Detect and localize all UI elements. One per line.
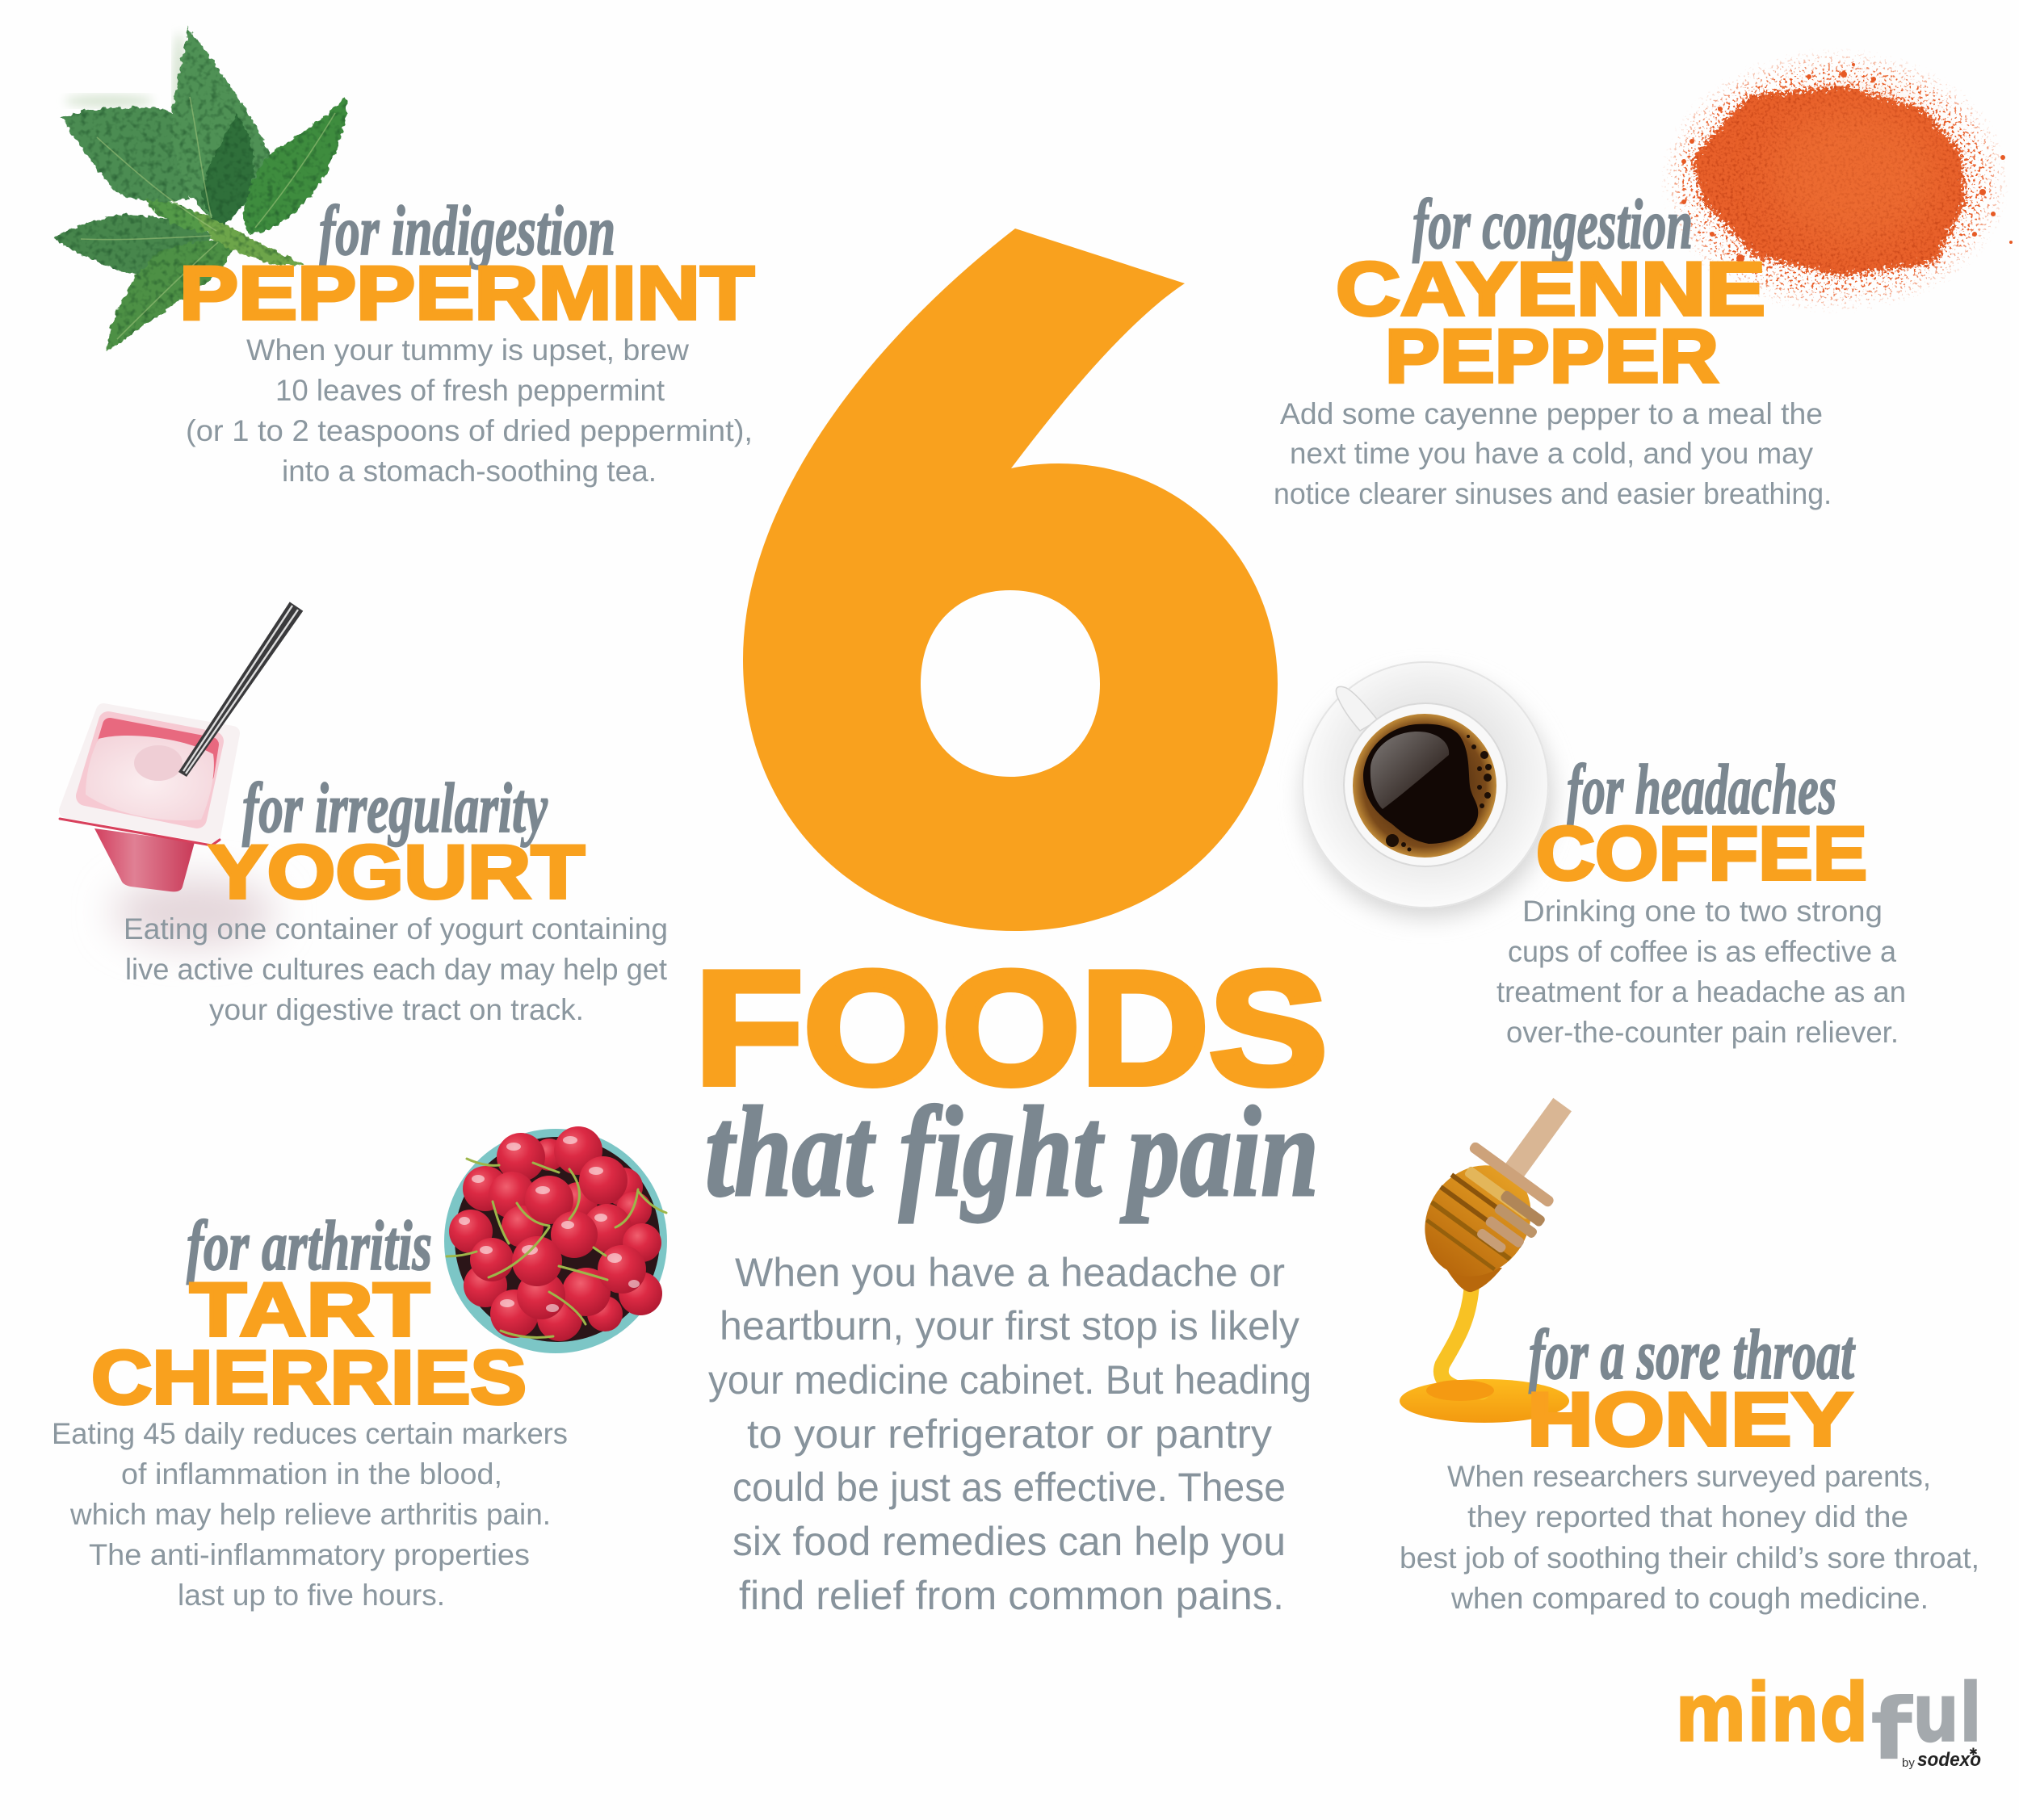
logo: mindful by sodexo: f	[1870, 1680, 1913, 1779]
intro paragraph: your medicine cabinet. But heading	[708, 1357, 1312, 1403]
body text: coffee	[1496, 895, 1906, 1049]
label: for irregularity: for irregularity	[242, 770, 548, 848]
body text: honey: when compared to cough medicine.	[1450, 1582, 1929, 1615]
intro paragraph: to your refrigerator or pantry	[747, 1411, 1272, 1457]
icon: cayenne powder	[1681, 63, 2013, 287]
panel: yogurt	[60, 602, 668, 1026]
logo: mindful by sodexo: ✱	[1969, 1747, 1978, 1759]
logo: mindful by sodexo: ul	[1912, 1666, 1982, 1760]
body text: honey: When researchers surveyed parents,	[1447, 1460, 1931, 1493]
label: for congestion: for congestion	[1412, 186, 1693, 264]
body text: cayenne: Add some cayenne pepper to a meal the	[1280, 397, 1823, 430]
panel: tart cherries	[52, 1126, 667, 1612]
body text: yogurt: your digestive tract on track.	[209, 993, 584, 1026]
body text: cayenne	[1274, 397, 1832, 510]
body text: yogurt: live active cultures each day may help get	[125, 953, 668, 986]
label: for a sore throat: for a sore throat	[1529, 1316, 1856, 1394]
icon: yogurt cup with spoon	[60, 602, 303, 946]
body text: cherries: which may help relieve arthritis pain.	[69, 1498, 551, 1531]
logo: mindful by sodexo: by	[1902, 1756, 1915, 1770]
heading: CAYENNE PEPPER: PEPPER	[1385, 313, 1719, 398]
icon: mint leaves	[53, 27, 346, 351]
panel: coffee	[1302, 661, 1906, 1049]
body text: peppermint: When your tummy is upset, brew	[246, 333, 689, 367]
label: for indigestion: for indigestion	[319, 192, 615, 270]
body text: peppermint	[186, 333, 753, 488]
body text: cherries: Eating 45 daily reduces certain markers	[52, 1417, 568, 1450]
body text: honey	[1400, 1460, 1979, 1615]
heading: CAYENNE PEPPER: CAYENNE	[1336, 246, 1765, 331]
heading: COFFEE: COFFEE	[1536, 811, 1867, 895]
panel: honey	[1400, 1076, 1979, 1615]
intro paragraph: six food remedies can help you	[732, 1519, 1286, 1564]
heading: PEPPERMINT: PEPPERMINT	[179, 250, 754, 335]
heading: YOGURT: YOGURT	[208, 829, 585, 914]
label: for headaches: for headaches	[1567, 751, 1836, 829]
panel: cayenne pepper	[1274, 63, 2013, 510]
body text: honey: best job of soothing their child’s sore throat,	[1400, 1541, 1979, 1575]
body text: coffee: Drinking one to two strong	[1522, 895, 1883, 928]
intro paragraph	[708, 1250, 1312, 1618]
body text: coffee: cups of coffee is as effective a	[1508, 935, 1896, 968]
title: FOODS: FOODS	[695, 938, 1328, 1118]
body text: cherries	[52, 1417, 568, 1612]
body text: yogurt	[124, 912, 668, 1026]
body text: cherries: of inflammation in the blood,	[121, 1457, 502, 1491]
icon: honey dipper and puddle	[1400, 1076, 1607, 1423]
body text: peppermint: 10 leaves of fresh peppermint	[275, 374, 665, 407]
body text: cherries: The anti-inflammatory properties	[89, 1538, 530, 1571]
body text: peppermint: (or 1 to 2 teaspoons of dried peppermint),	[186, 414, 753, 447]
icon: coffee cup	[1302, 661, 1552, 917]
panel: peppermint	[53, 27, 754, 488]
heading: HONEY: HONEY	[1527, 1377, 1853, 1461]
heading: TART CHERRIES: TART	[190, 1267, 430, 1352]
body text: coffee: treatment for a headache as an	[1496, 975, 1906, 1009]
heading: TART CHERRIES	[91, 1267, 527, 1420]
icon: bowl of cherries	[444, 1126, 667, 1353]
logo: mindful by sodexo	[1675, 1666, 1982, 1779]
body text: yogurt: Eating one container of yogurt containing	[124, 912, 668, 946]
logo: mindful by sodexo: mind	[1675, 1666, 1869, 1760]
subtitle: that fight pain: that fight pain	[705, 1080, 1319, 1223]
body text: honey: they reported that honey did the	[1467, 1500, 1908, 1533]
logo: mindful by sodexo: sodexo	[1917, 1749, 1981, 1771]
body text: peppermint: into a stomach-soothing tea.	[282, 455, 657, 488]
label: for arthritis: for arthritis	[187, 1207, 432, 1285]
heading: CAYENNE PEPPER	[1336, 246, 1765, 398]
intro paragraph: find relief from common pains.	[739, 1573, 1284, 1618]
big numeral 6	[743, 229, 1278, 931]
intro paragraph: heartburn, your first stop is likely	[720, 1303, 1299, 1348]
intro paragraph: When you have a headache or	[735, 1250, 1285, 1295]
body text: coffee: over-the-counter pain reliever.	[1506, 1016, 1899, 1049]
body text: cherries: last up to five hours.	[178, 1579, 445, 1612]
body text: cayenne: next time you have a cold, and you may	[1290, 437, 1813, 470]
body text: cayenne: notice clearer sinuses and easier breathing.	[1274, 477, 1832, 510]
heading: TART CHERRIES: CHERRIES	[91, 1335, 527, 1420]
intro paragraph: could be just as effective. These	[732, 1465, 1286, 1510]
